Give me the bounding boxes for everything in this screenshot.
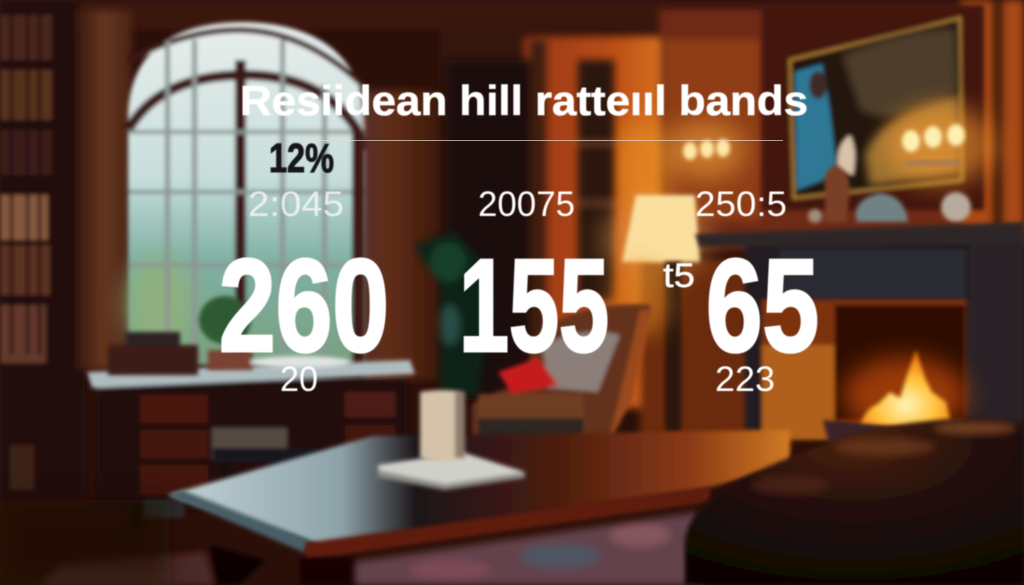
- small label t5: t5: [663, 257, 695, 295]
- big number 65: 65: [706, 232, 819, 379]
- column 3 footnote: 223: [715, 360, 775, 399]
- left bookshelf: [0, 0, 85, 500]
- column 2 year: 20075: [478, 185, 575, 224]
- big number 155: 155: [459, 232, 609, 379]
- arched window: [128, 22, 368, 370]
- column 1 year: 2:045: [248, 185, 344, 224]
- leather armchair: [472, 304, 652, 445]
- floor rug: [355, 512, 700, 585]
- desk books and potted plant: [108, 296, 350, 375]
- mantel ornaments: [808, 165, 971, 223]
- left sconce: [665, 120, 745, 180]
- potted plant: [415, 230, 492, 395]
- column 3 year: 250:5: [695, 185, 787, 224]
- coffee table: [168, 430, 790, 585]
- white cup: [420, 390, 465, 462]
- left curtain: [76, 10, 132, 370]
- right curtain: [364, 90, 440, 380]
- fire: [843, 350, 967, 433]
- painting: [762, 5, 984, 210]
- fire grate: [823, 420, 940, 448]
- leather sofa: [685, 418, 1024, 585]
- title: Resiidean hill ratteııl bands: [240, 77, 808, 124]
- stack of books: [378, 452, 525, 490]
- wooden desk: [87, 360, 415, 530]
- right sconce: [885, 105, 995, 185]
- table lamp: [600, 195, 710, 432]
- title divider: [300, 140, 783, 141]
- fireplace: [695, 222, 1024, 440]
- column 1 footnote: 20: [280, 360, 318, 399]
- warm vignette: [0, 500, 170, 585]
- rug left edge: [40, 552, 215, 585]
- stat: 12%: 12%: [269, 135, 334, 181]
- big number 260: 260: [219, 232, 389, 379]
- bookcase: [445, 40, 614, 400]
